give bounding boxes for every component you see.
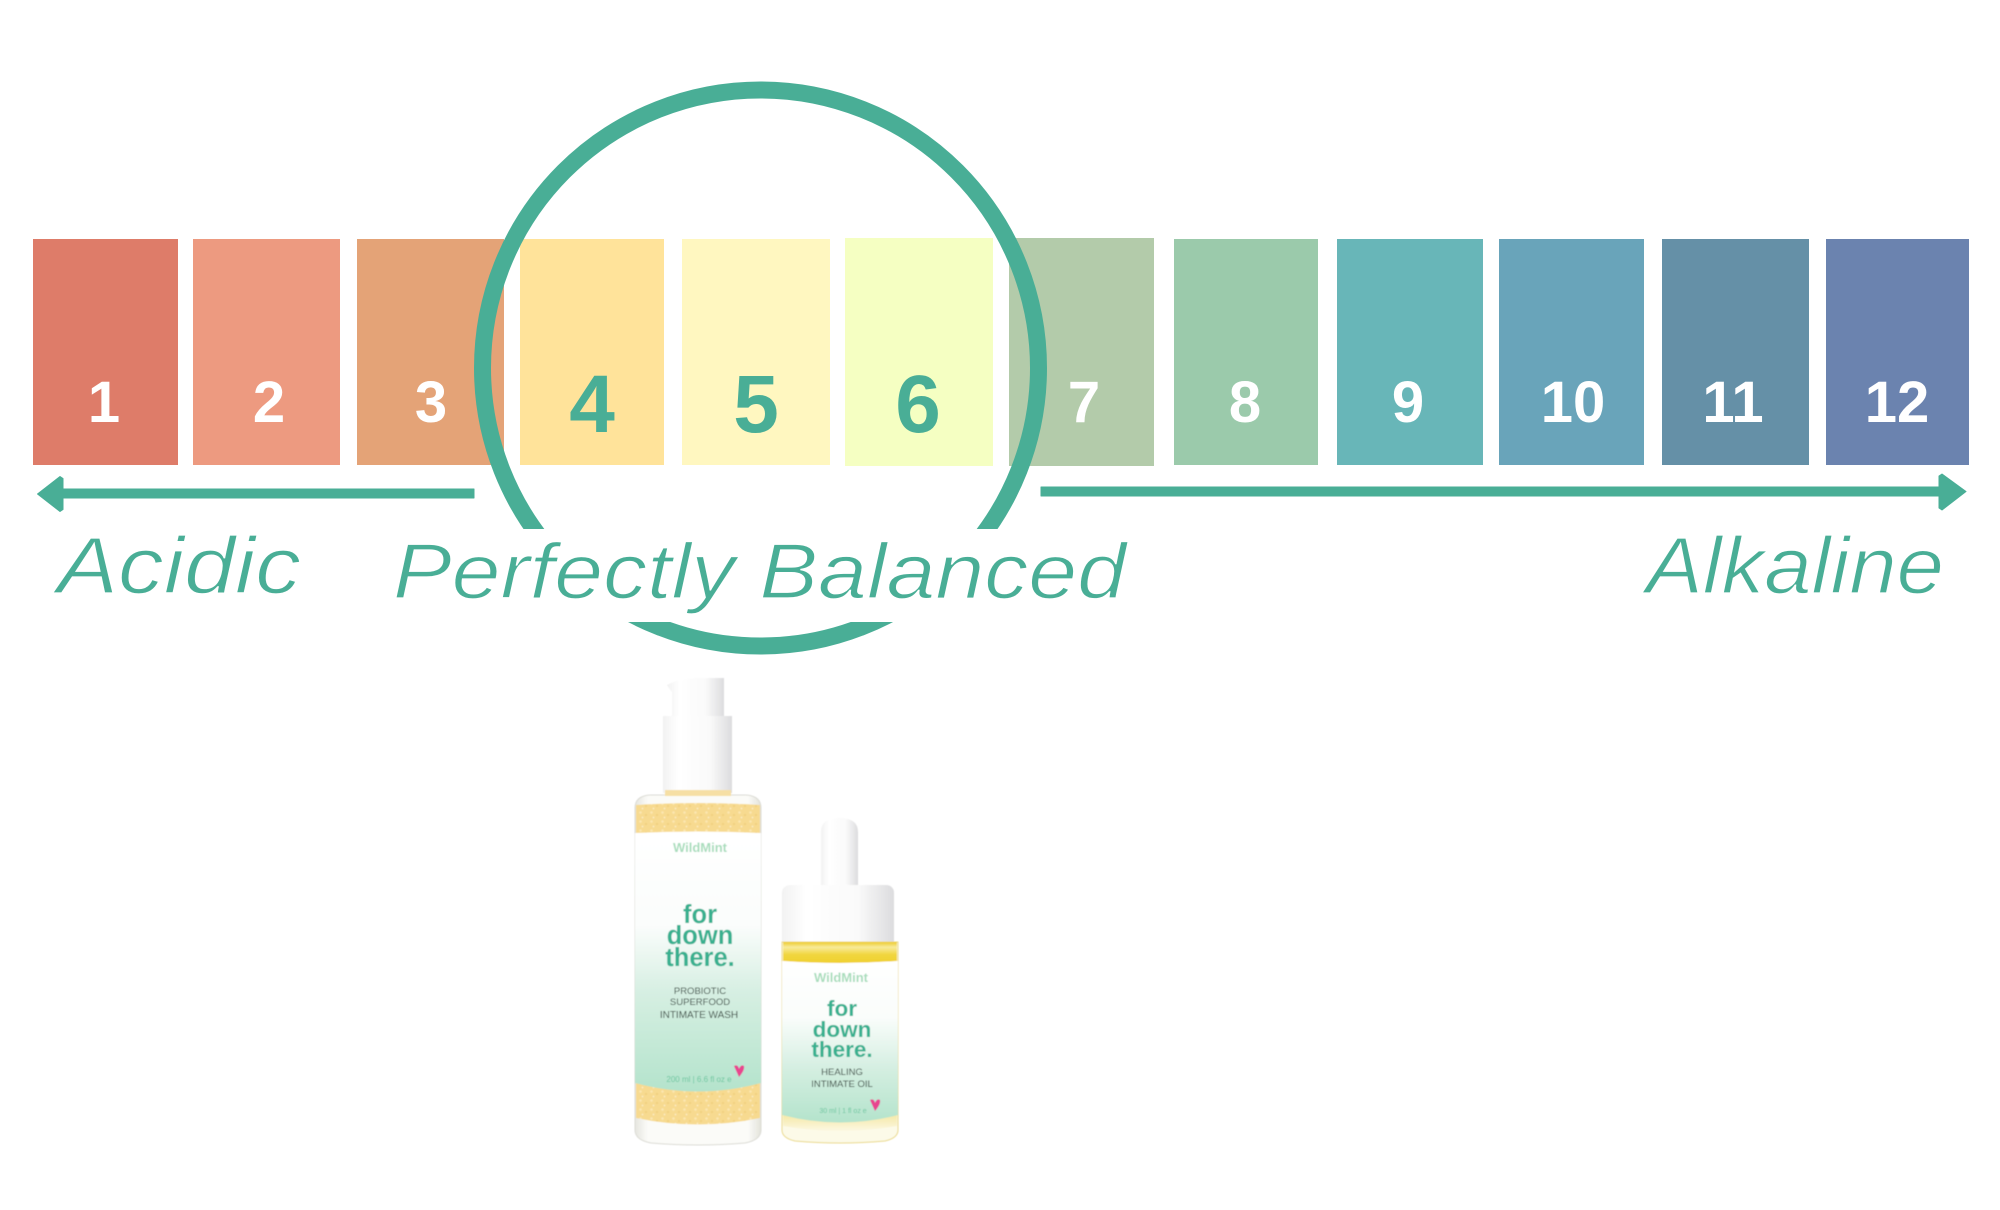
number 3: 3 xyxy=(415,370,447,435)
dropper cap xyxy=(782,885,894,942)
bar 11 xyxy=(1662,239,1809,465)
scale numbers xyxy=(88,359,1929,450)
number 12: 12 xyxy=(1865,370,1929,435)
icon: made for vaginas logo xyxy=(870,1099,880,1111)
brand: WildMint xyxy=(814,970,869,985)
gold gel, bottom xyxy=(636,1080,760,1124)
product description: INTIMATE WASH xyxy=(660,1010,738,1021)
label: Acidic: Acidic xyxy=(52,521,301,610)
product name: down xyxy=(813,1017,871,1042)
bar 6 xyxy=(845,238,993,466)
number 6: 6 xyxy=(895,359,941,450)
product: intimate wash bottle xyxy=(635,678,761,1145)
arrow: acidic direction xyxy=(38,476,474,512)
bar 9 xyxy=(1337,239,1483,465)
product name: for xyxy=(683,901,717,929)
volume: 30 ml | 1 fl oz e xyxy=(819,1108,867,1115)
number 9: 9 xyxy=(1392,370,1424,435)
bar 8 xyxy=(1174,239,1318,465)
bar 1 xyxy=(33,239,178,465)
product name: down xyxy=(667,922,733,950)
volume: 200 ml | 6.6 fl oz e xyxy=(666,1075,732,1084)
yellow oil, top xyxy=(783,942,897,963)
number 5: 5 xyxy=(733,359,779,450)
glass body xyxy=(782,942,898,1143)
product name: there. xyxy=(665,944,735,972)
dropper bulb xyxy=(821,818,858,885)
pH colour bars xyxy=(33,238,1969,466)
bar 12 xyxy=(1826,239,1969,465)
bar 3 xyxy=(357,239,504,465)
product description xyxy=(660,986,738,1021)
product description xyxy=(811,1067,873,1090)
bar 5 xyxy=(682,239,830,465)
glass body xyxy=(635,795,761,1145)
arrow: alkaline direction xyxy=(1041,474,1966,510)
product description: HEALING xyxy=(821,1067,863,1078)
product: intimate oil bottle xyxy=(782,818,898,1143)
product name: there. xyxy=(811,1037,873,1062)
bar 4 xyxy=(520,239,664,465)
product description: INTIMATE OIL xyxy=(811,1079,873,1090)
product name xyxy=(811,996,873,1062)
product name xyxy=(665,901,735,972)
icon: made for vaginas logo xyxy=(734,1065,744,1077)
label: Perfectly Balanced: Perfectly Balanced xyxy=(393,527,1129,615)
number 11: 11 xyxy=(1702,370,1764,435)
product description: SUPERFOOD xyxy=(670,997,730,1008)
balanced range circle xyxy=(440,90,1080,646)
pump collar xyxy=(663,716,732,793)
pump head xyxy=(667,678,724,716)
number 2: 2 xyxy=(253,370,285,435)
bar 2 xyxy=(193,239,340,465)
gold gel, top xyxy=(636,803,760,834)
number 4: 4 xyxy=(569,359,615,450)
product description: PROBIOTIC xyxy=(674,986,726,997)
label panel xyxy=(782,961,898,1122)
number 10: 10 xyxy=(1541,370,1605,435)
number 1: 1 xyxy=(88,370,120,435)
label: Alkaline: Alkaline xyxy=(1642,521,1944,610)
brand: WildMint xyxy=(673,840,728,855)
label panel xyxy=(635,832,761,1092)
number 7: 7 xyxy=(1068,370,1100,435)
collar base xyxy=(665,790,731,796)
product name: for xyxy=(827,996,857,1021)
number 8: 8 xyxy=(1229,370,1261,435)
bar 10 xyxy=(1499,239,1644,465)
yellow oil, bottom xyxy=(783,1115,897,1131)
bar 7 xyxy=(1009,238,1154,466)
